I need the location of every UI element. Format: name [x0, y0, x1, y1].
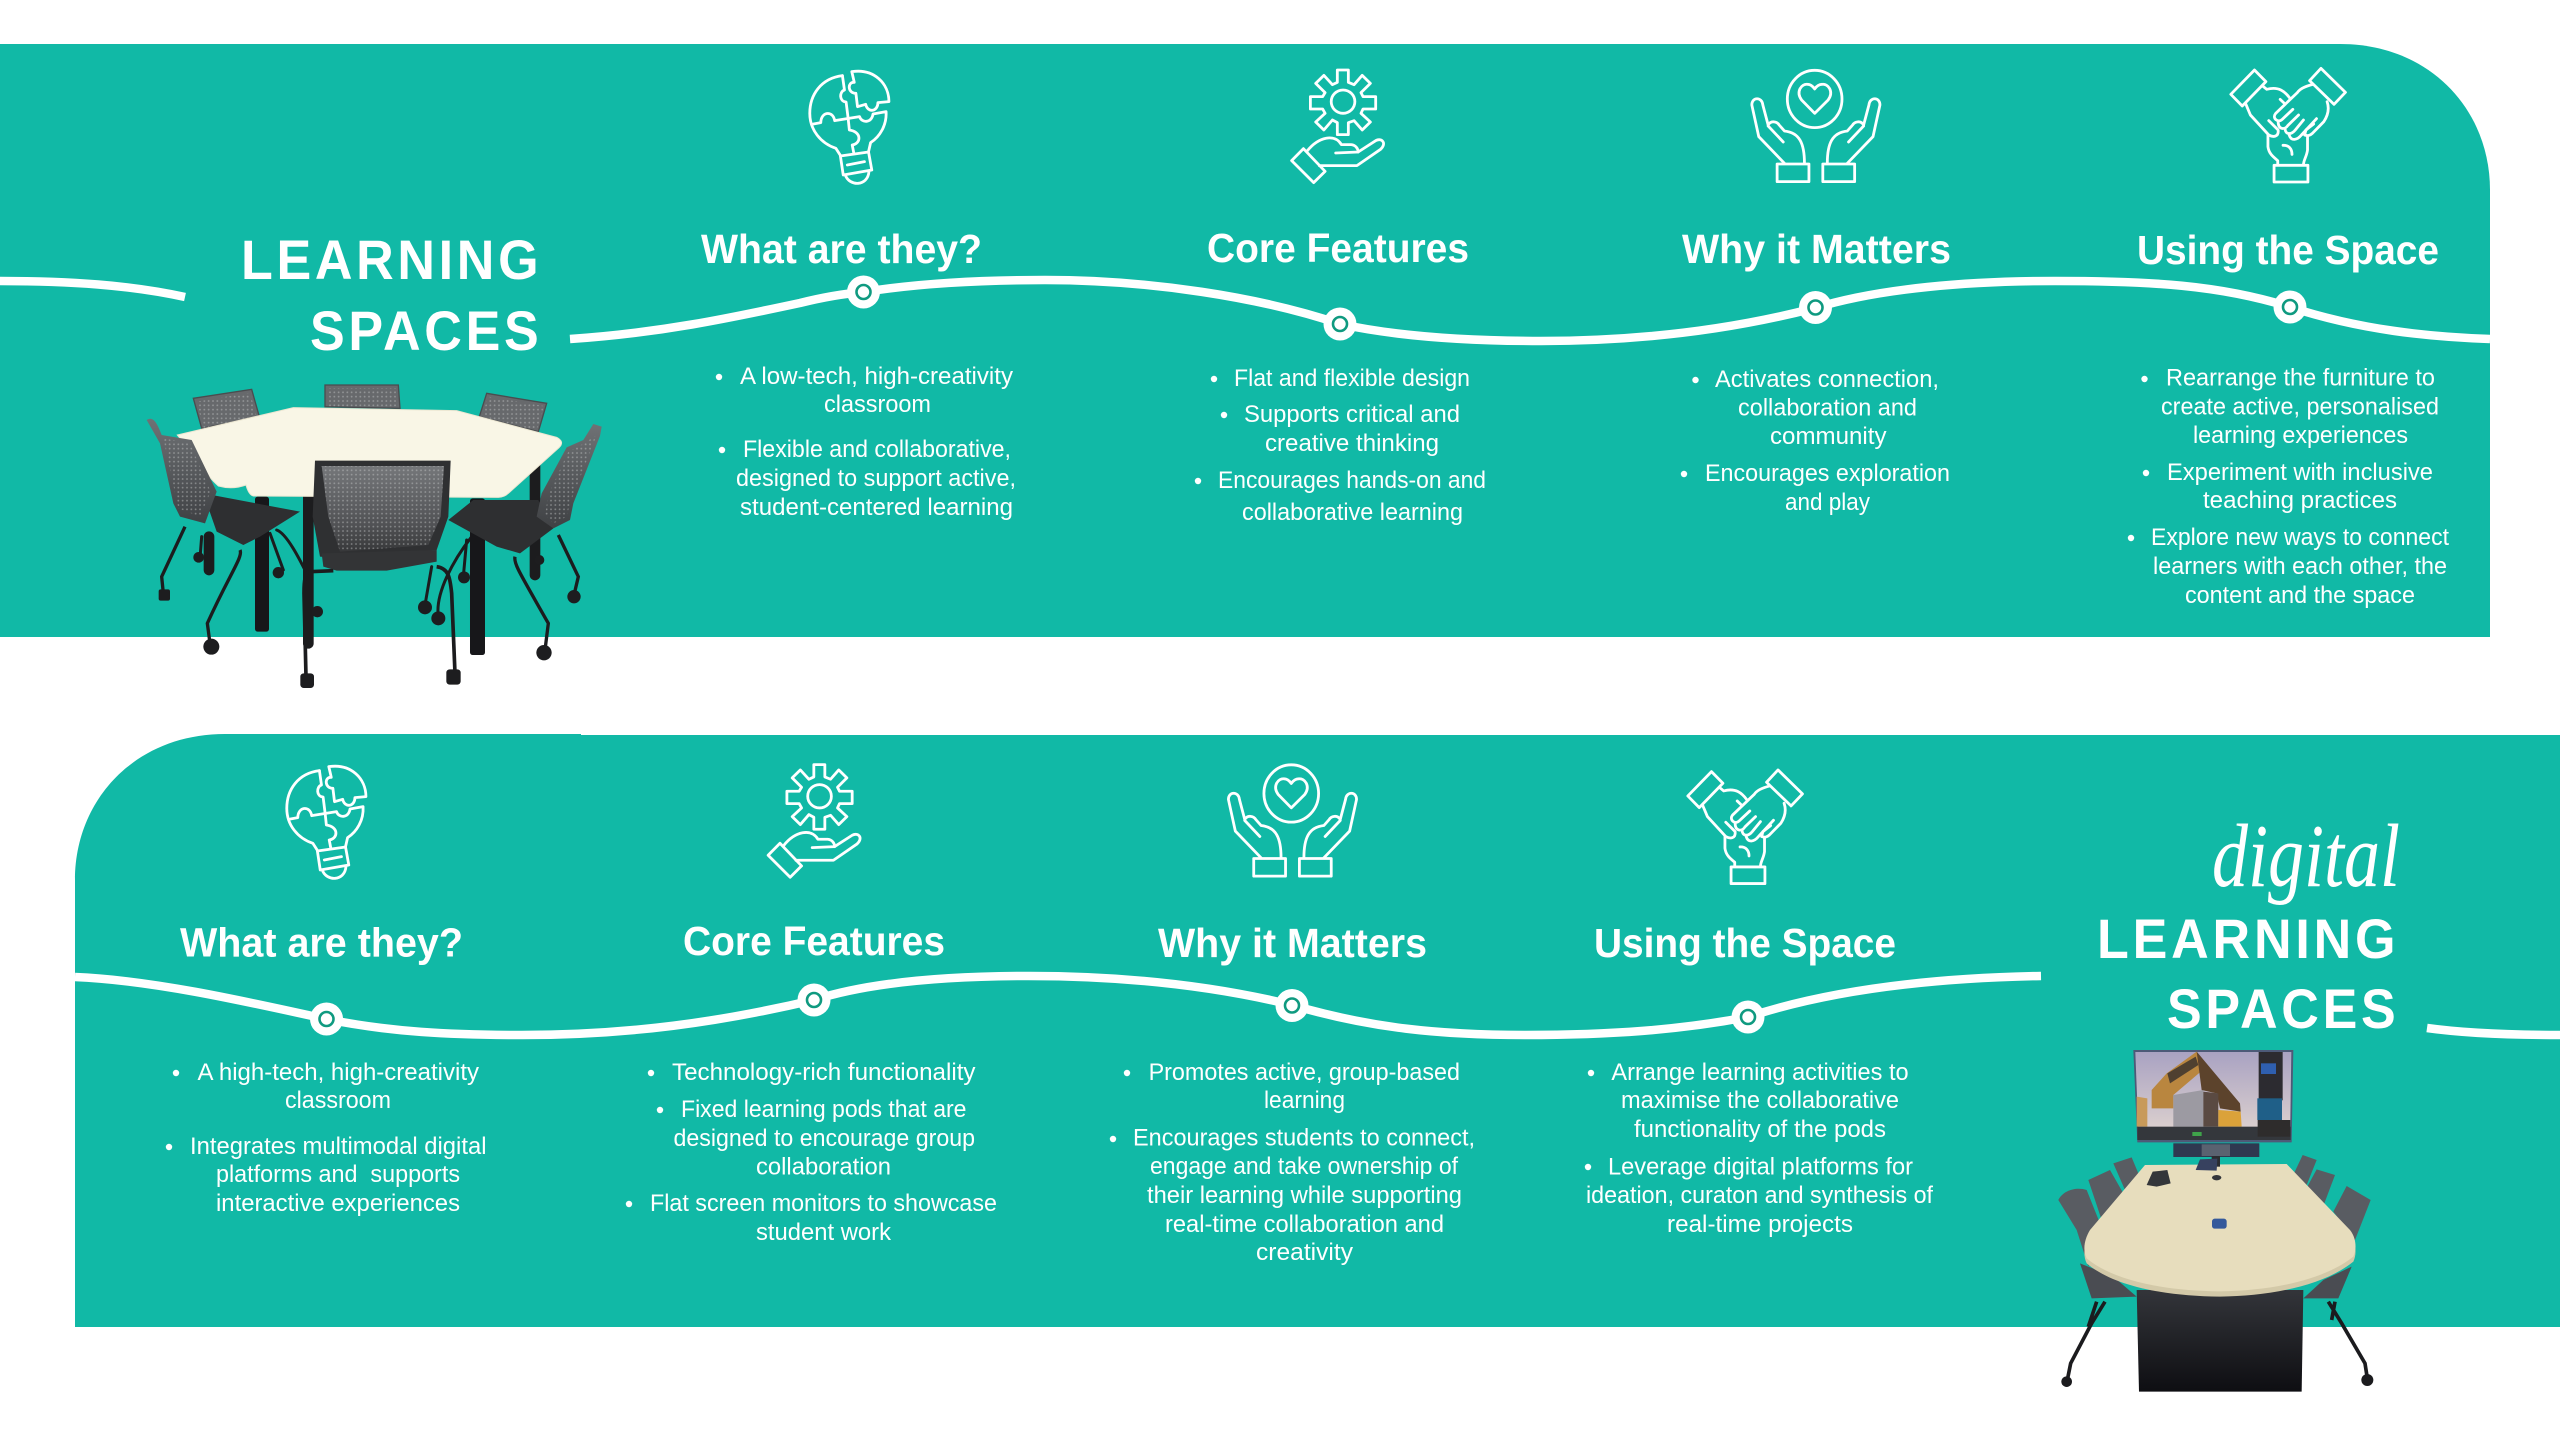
bullet list: core features: designed to encourage group: [674, 1125, 975, 1152]
bullet list: why it matters: Encourages exploration: [1705, 460, 1950, 487]
illustration: hexagonal table with chairs: [147, 385, 602, 688]
bullet list: what are they: student-centered learning: [740, 494, 1013, 521]
bullet list: core features: Encourages hands-on and: [1218, 467, 1486, 494]
column: core features (learning spaces): [1195, 70, 1486, 526]
panel: learning spaces background: [0, 44, 2490, 637]
bullet list: core features: Flat and flexible design: [1234, 365, 1470, 392]
bullet list: why it matters: engage and take ownership of: [1150, 1153, 1458, 1180]
bullet list: what are they: Integrates multimodal digital: [190, 1133, 486, 1160]
bullet list: core features: Fixed learning pods that are: [681, 1096, 966, 1123]
heading: core features: Core Features: [683, 918, 945, 964]
heading: why it matters: Why it Matters: [1682, 226, 1951, 272]
timeline: digital curve: [75, 976, 2041, 1035]
bullet list: using the space: Rearrange the furniture to: [2166, 365, 2435, 392]
column: core features (digital): [626, 765, 997, 1246]
back chairs: [193, 385, 547, 432]
left and right chairs: [2058, 1155, 2371, 1298]
bullet list: why it matters: Promotes active, group-based: [1149, 1059, 1460, 1086]
heading: what are they: What are they?: [701, 226, 982, 272]
bullet list: what are they: platforms and supports: [216, 1161, 460, 1188]
icon: hands holding heart: [1752, 70, 1880, 182]
bullet list: why it matters: [1110, 1059, 1475, 1266]
side chair seats: [203, 493, 300, 545]
timeline markers: learning spaces: [847, 276, 2306, 340]
bullet list: using the space: Explore new ways to connect: [2151, 524, 2449, 551]
bullet list: what are they: interactive experiences: [216, 1190, 460, 1217]
bullet list: what are they: A low-tech, high-creativity: [740, 363, 1014, 390]
bullet list: why it matters: learning: [1264, 1087, 1345, 1114]
heading: what are they: What are they?: [180, 920, 463, 966]
title: learning spaces: LEARNING: [241, 229, 539, 291]
bullet list: why it matters: Encourages students to connect,: [1133, 1125, 1475, 1152]
table top: [177, 408, 562, 497]
bullet list: what are they: classroom: [824, 391, 931, 418]
column: what are they (learning spaces): [701, 71, 1016, 521]
bullet list: using the space: Leverage digital platforms for: [1608, 1154, 1913, 1180]
bullet list: core features: Technology-rich functionality: [672, 1059, 976, 1086]
table devices: [2196, 1159, 2217, 1171]
base: [2137, 1290, 2303, 1392]
heading: using the space: Using the Space: [1594, 920, 1896, 966]
bullet list: core features: creative thinking: [1265, 430, 1439, 457]
timeline markers: digital learning spaces: [310, 984, 1764, 1036]
bullet list: using the space: learners with each other, the: [2153, 553, 2447, 580]
bullet list: using the space: functionality of the pods: [1634, 1116, 1886, 1143]
monitor: [2133, 1050, 2293, 1142]
bullet list: core features: student work: [756, 1219, 892, 1246]
icon: hands holding heart: [1228, 765, 1357, 876]
title: digital learning spaces: digital: [2212, 807, 2400, 906]
bullet list: core features: Flat screen monitors to showcase: [650, 1190, 997, 1217]
bullet list: why it matters: and play: [1785, 489, 1871, 516]
title: digital learning spaces: SPACES: [2167, 978, 2396, 1040]
heading: using the space: Using the Space: [2137, 227, 2439, 273]
icon: three joined hands: [2231, 68, 2345, 182]
bullet list: using the space: content and the space: [2185, 582, 2415, 609]
bullet list: why it matters: [1681, 366, 1950, 516]
icon: gear over hand: [768, 765, 860, 877]
bullet list: what are they: designed to support active,: [736, 465, 1016, 492]
bullet list: using the space: [2128, 365, 2449, 609]
bullet list: using the space: [1585, 1059, 1933, 1238]
bullet list: core features: [626, 1059, 997, 1246]
bullet list: using the space: ideation, curaton and synthesis of: [1586, 1182, 1933, 1209]
column: why it matters (learning spaces): [1681, 70, 1951, 516]
bullet list: why it matters: their learning while supporting: [1147, 1182, 1462, 1209]
timeline: digital right stub: [2427, 1028, 2560, 1035]
column: what are they (digital): [166, 766, 487, 1217]
bullet list: core features: [1195, 365, 1486, 526]
bullet list: what are they: [716, 363, 1016, 521]
bullet list: using the space: teaching practices: [2203, 487, 2397, 514]
right chair back: [537, 424, 602, 528]
title: digital learning spaces: [2097, 807, 2400, 1040]
bullet list: why it matters: real-time collaboration and: [1165, 1211, 1444, 1238]
icon: puzzle light bulb: [810, 71, 889, 183]
icon: puzzle light bulb: [287, 766, 366, 878]
icon: three joined hands: [1688, 770, 1802, 884]
timeline: learning spaces curve: [570, 280, 2490, 341]
bullet list: why it matters: community: [1770, 423, 1887, 450]
bullet list: using the space: real-time projects: [1667, 1211, 1853, 1238]
column: using the space (learning spaces): [2128, 68, 2449, 609]
bullet list: what are they: A high-tech, high-creativity: [198, 1059, 480, 1086]
timeline: learning spaces left stub: [0, 281, 185, 297]
bullet list: what are they: classroom: [285, 1087, 391, 1114]
side chair legs: [162, 527, 578, 650]
table top: [2084, 1164, 2356, 1291]
bullet list: using the space: maximise the collaborative: [1621, 1087, 1899, 1114]
bullet list: why it matters: Activates connection,: [1715, 366, 1939, 393]
bullet list: why it matters: collaboration and: [1738, 394, 1917, 422]
bullet list: using the space: Arrange learning activities to: [1611, 1059, 1909, 1086]
bullet list: what are they: [166, 1059, 487, 1217]
title: learning spaces: [241, 229, 539, 362]
column: why it matters (digital): [1110, 765, 1475, 1266]
icon: gear over hand: [1292, 70, 1384, 183]
bullet list: using the space: learning experiences: [2193, 422, 2408, 449]
bullet list: why it matters: creativity: [1256, 1239, 1354, 1266]
column: using the space (digital): [1585, 770, 1933, 1238]
bullet list: core features: collaborative learning: [1242, 499, 1463, 526]
heading: core features: Core Features: [1207, 225, 1469, 271]
front chair: [313, 461, 451, 558]
title: digital learning spaces: LEARNING: [2097, 908, 2396, 970]
panel: digital learning spaces background: [75, 734, 2560, 1327]
title: learning spaces: SPACES: [310, 300, 539, 362]
bullet list: using the space: Experiment with inclusive: [2167, 459, 2433, 486]
table legs: [255, 497, 269, 632]
bullet list: core features: Supports critical and: [1244, 401, 1460, 428]
left chair back: [147, 419, 217, 523]
soundbar and camera: [2173, 1143, 2259, 1157]
bullet list: using the space: create active, personalised: [2161, 394, 2439, 421]
bullet list: core features: collaboration: [756, 1154, 891, 1180]
heading: why it matters: Why it Matters: [1158, 920, 1427, 966]
illustration: digital table with monitor and chairs: [2058, 1050, 2373, 1392]
bullet list: what are they: Flexible and collaborative,: [743, 436, 1011, 463]
table edge: [2084, 1169, 2356, 1297]
